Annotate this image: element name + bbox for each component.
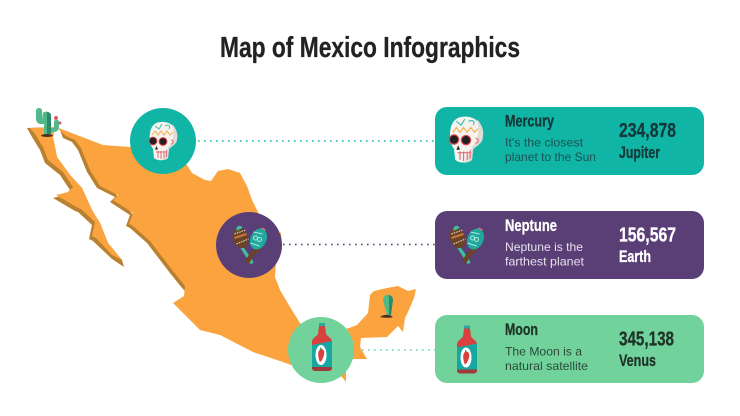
Mercury description: planet to the Sun [505, 150, 596, 164]
connector: Mercury [198, 140, 435, 142]
Neptune description: Neptune is the [505, 240, 583, 254]
map land [30, 127, 122, 260]
icon: maracas [447, 225, 487, 264]
map marker: maracas [216, 212, 282, 278]
Moon description: natural satellite [505, 359, 588, 373]
Moon label: Venus [619, 351, 656, 370]
Mercury description: It's the closest [505, 136, 584, 150]
panel: Mercury [435, 107, 704, 175]
Mercury value: 234,878 [619, 120, 676, 142]
icon: skull [449, 117, 483, 163]
Neptune value: 156,567 [619, 224, 676, 246]
icon: cactus on Baja [36, 108, 62, 137]
connector: Moon [362, 349, 435, 351]
Neptune description: farthest planet [505, 254, 585, 268]
panel: Moon [435, 315, 704, 383]
map shadow [27, 127, 190, 292]
Mercury heading: Mercury [505, 112, 554, 130]
Neptune heading: Neptune [505, 216, 557, 235]
title: Map of Mexico Infographics [220, 32, 520, 64]
icon: cactus on Yucatan [380, 295, 393, 318]
connector: Neptune [283, 244, 435, 246]
Neptune label: Earth [619, 247, 651, 266]
map of Mexico [27, 108, 416, 382]
Mercury label: Jupiter [619, 143, 660, 162]
map marker: skull [130, 108, 196, 174]
map marker: hot sauce [288, 317, 354, 383]
panel: Neptune [435, 211, 704, 279]
Moon value: 345,138 [619, 328, 674, 350]
icon: hot sauce [457, 326, 477, 374]
Moon heading: Moon [505, 320, 538, 339]
Moon description: The Moon is a [505, 344, 582, 358]
